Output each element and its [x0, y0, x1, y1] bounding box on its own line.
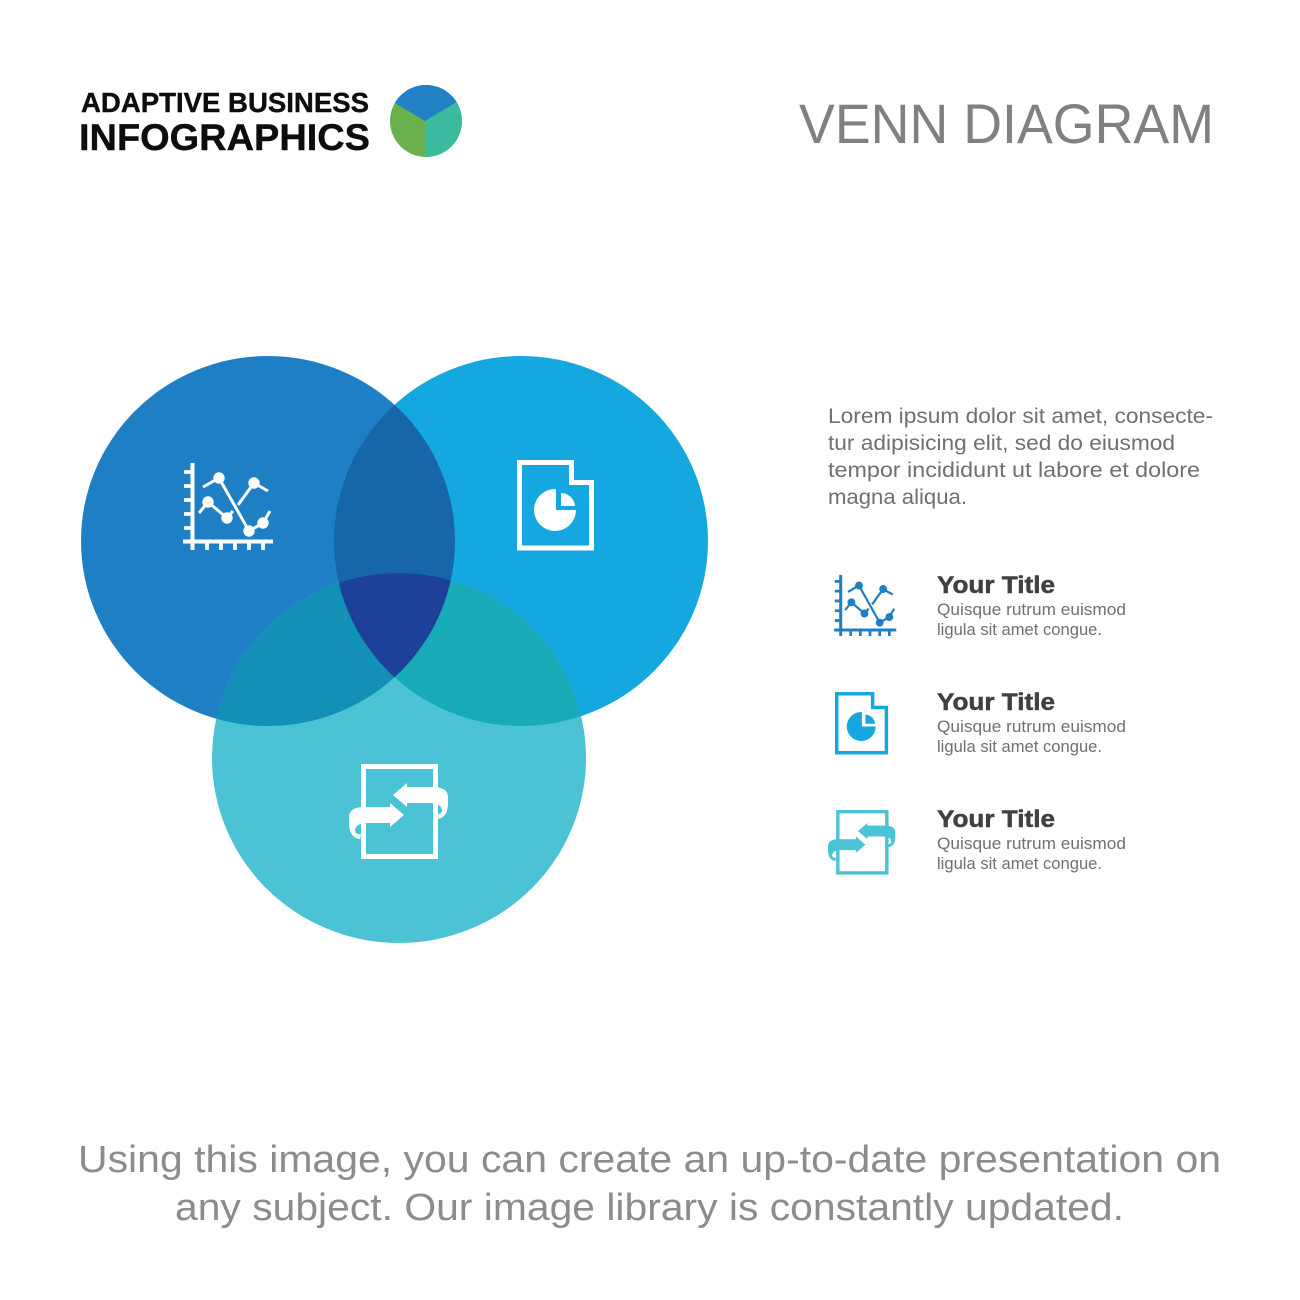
legend text 3: Quisque rutrum euismod: [937, 835, 1126, 853]
icon: line chart white: [183, 463, 273, 550]
icon: swap arrows teal: [828, 812, 895, 873]
icon: document with pie white: [520, 462, 592, 548]
icon: document with pie blue: [837, 694, 886, 753]
legend item 2: [837, 689, 1126, 756]
legend text 2: ligula sit amet congue.: [937, 738, 1102, 756]
circle: right: [334, 356, 708, 726]
logo heading: ADAPTIVE BUSINESS: [81, 87, 369, 118]
description paragraph: tur adipisicing elit, sed do eiusmod: [828, 432, 1175, 455]
legend text 1: ligula sit amet congue.: [937, 621, 1102, 639]
overlap: right and bottom: [339, 573, 581, 726]
legend title 1: Your Title: [937, 572, 1055, 599]
logo heading: INFOGRAPHICS: [79, 117, 370, 158]
legend item 3: [828, 806, 1126, 873]
footer text: Using this image, you can create an up-to-date presentation on: [78, 1139, 1221, 1181]
legend text 1: Quisque rutrum euismod: [937, 601, 1126, 619]
legend text 3: ligula sit amet congue.: [937, 855, 1102, 873]
description paragraph: tempor incididunt ut labore et dolore: [828, 459, 1200, 482]
logo heading: [79, 87, 370, 158]
legend item 1: [834, 572, 1126, 639]
overlap: left and bottom: [216, 583, 394, 726]
icon: line chart blue: [834, 575, 896, 636]
footer text: any subject. Our image library is constantly updated.: [175, 1187, 1124, 1229]
title: VENN DIAGRAM: [799, 92, 1214, 155]
icon: swap arrows white: [349, 766, 448, 856]
overlap: center: [339, 573, 451, 678]
legend title 3: Your Title: [937, 806, 1055, 833]
logo pie icon: [390, 85, 462, 157]
footer text: [78, 1139, 1221, 1229]
venn diagram: [81, 356, 708, 943]
circle: left: [81, 356, 455, 726]
legend title 2: Your Title: [937, 689, 1055, 716]
legend text 2: Quisque rutrum euismod: [937, 718, 1126, 736]
description paragraph: Lorem ipsum dolor sit amet, consecte-: [828, 405, 1213, 428]
legend text 2: [937, 718, 1126, 756]
description paragraph: [828, 405, 1213, 509]
legend text 3: [937, 835, 1126, 873]
overlap: left and right: [334, 405, 455, 583]
description paragraph: magna aliqua.: [828, 486, 967, 509]
legend text 1: [937, 601, 1126, 639]
circle: bottom: [212, 573, 586, 943]
